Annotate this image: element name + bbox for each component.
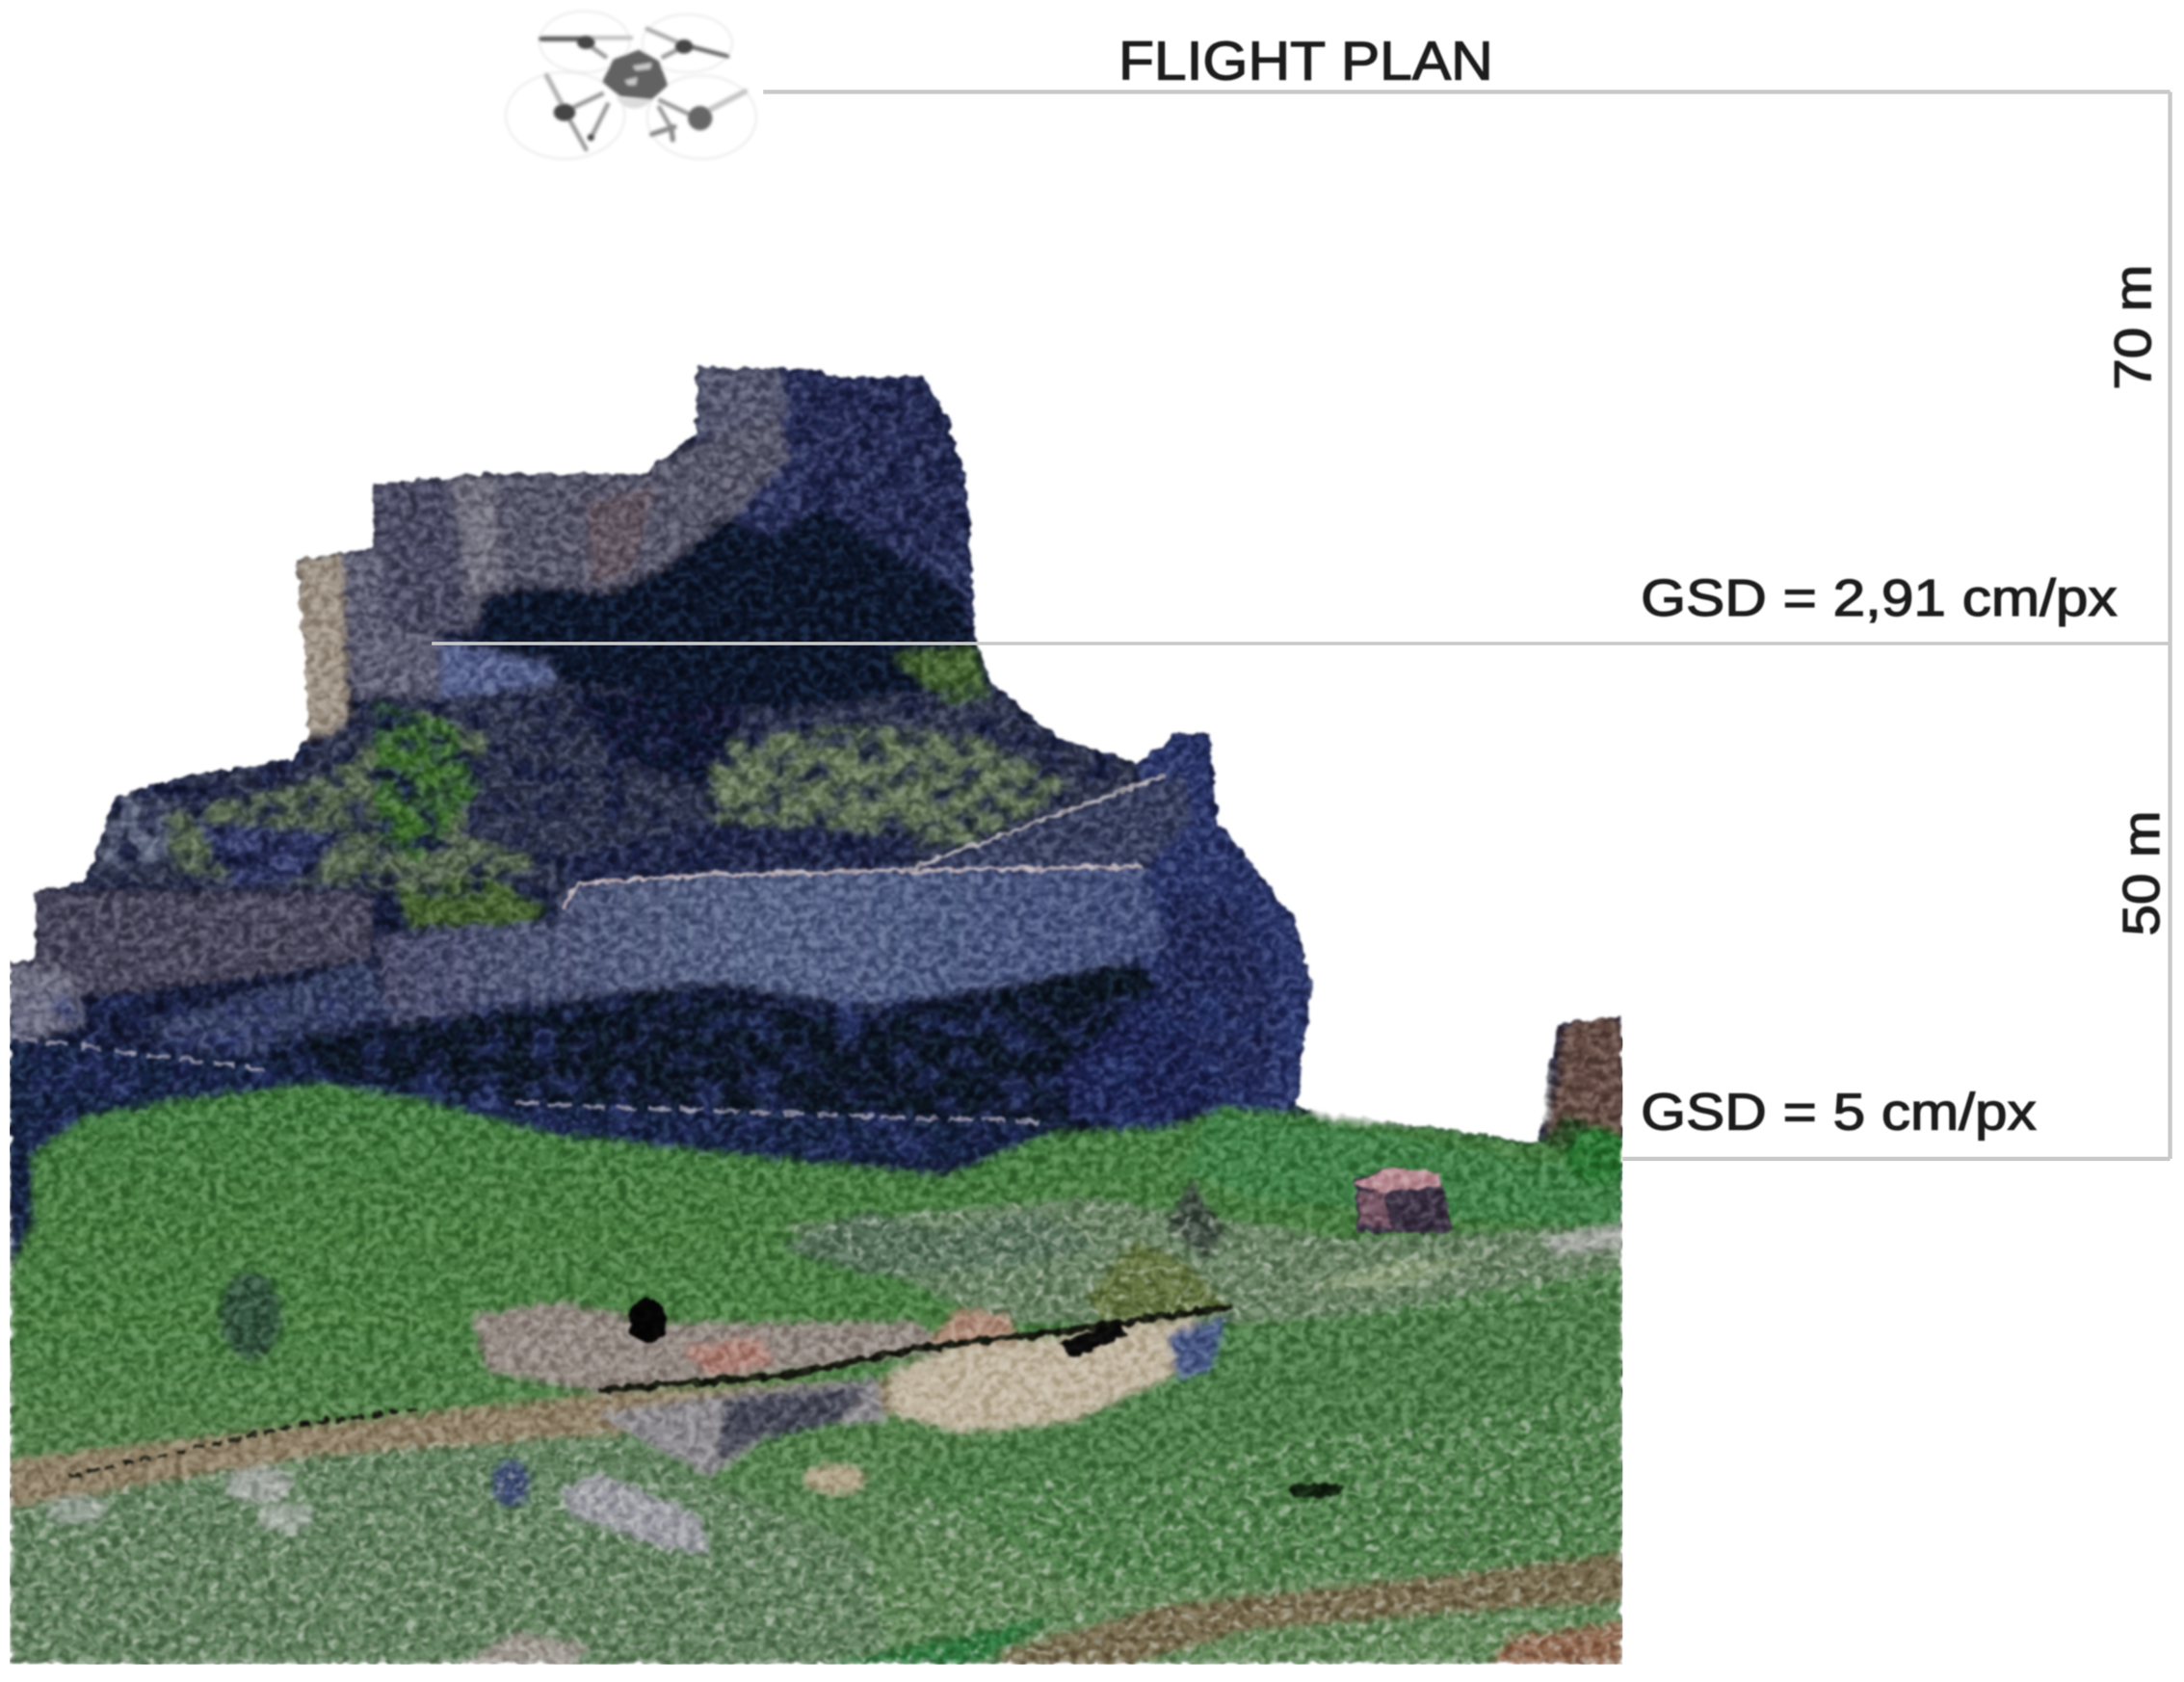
white right margin of the model — [1622, 975, 1650, 1682]
corner tower — [297, 554, 348, 738]
dark shadow under the keep — [480, 507, 978, 709]
drone body — [602, 50, 668, 99]
white cut below the model — [0, 1665, 2184, 1682]
lower left wall band — [10, 1038, 1044, 1184]
label: GSD at castle: GSD = 2,91 cm/px — [1641, 570, 2118, 627]
brown wall patch — [590, 491, 649, 578]
heading: flight plan: FLIGHT PLAN — [1118, 30, 1493, 91]
bright green wedge — [822, 1616, 1059, 1665]
dark trees — [1168, 1177, 1225, 1260]
sharp terrain details — [13, 775, 1233, 1477]
brown tree — [1543, 1016, 1622, 1143]
hillside mottled blotches — [84, 682, 1184, 919]
hillside dark band — [557, 822, 919, 894]
quarry pale — [891, 1309, 1212, 1432]
pink rubble patch — [682, 1337, 773, 1376]
stepped rampart — [153, 961, 390, 1052]
rampart below keep — [440, 641, 557, 703]
dashed wall crest — [13, 1038, 1044, 1122]
blue stone — [491, 1461, 531, 1506]
propeller blades — [541, 29, 745, 149]
bare soil corner — [1490, 1622, 1622, 1665]
hut pink side — [1358, 1193, 1390, 1225]
blue rock under the wall — [1059, 989, 1225, 1128]
pale path on right slope — [1303, 1260, 1477, 1288]
top line from drone — [763, 91, 2171, 93]
small boulder — [46, 1494, 107, 1525]
flight plan bracket lines — [432, 92, 2171, 1159]
small boulder — [225, 1466, 293, 1503]
white left margin — [0, 348, 10, 1682]
dirt track — [10, 1379, 891, 1507]
left dark edge — [10, 1038, 34, 1268]
grass patch behind wall — [397, 875, 550, 926]
stone wall right — [1546, 1225, 1622, 1253]
terrain colour layers — [0, 348, 1630, 1665]
hillside vegetation centre right — [697, 724, 1072, 850]
main wall top edge — [565, 866, 1143, 908]
rock mass base — [0, 348, 1630, 1212]
grey shrubs — [780, 1212, 1100, 1275]
hut — [1354, 1168, 1456, 1233]
main curtain wall — [376, 866, 1168, 1024]
grey green lower ground — [10, 1421, 891, 1665]
label: 50 m height: 50 m — [2114, 810, 2171, 936]
quarry pink mound — [926, 1309, 1016, 1344]
bright green slope — [891, 1268, 1622, 1588]
vertical height line — [2169, 92, 2171, 1159]
noise texture overlay — [0, 348, 1630, 1671]
quarry blue rock — [1168, 1316, 1228, 1379]
white gap before the tree — [1316, 975, 1546, 1121]
pale speckle over the fields — [0, 1184, 1630, 1671]
bottom line at ground — [1622, 1157, 2171, 1160]
hillside pale rock — [100, 787, 167, 863]
olive bush — [1087, 1240, 1233, 1324]
pink rubble area — [474, 1302, 947, 1393]
motors — [554, 36, 712, 141]
left curtain wall — [35, 891, 369, 997]
right rock shade — [1156, 891, 1278, 1115]
dark boulder face — [718, 1386, 871, 1462]
upper castle wall — [373, 412, 788, 629]
hillside green right patch — [891, 647, 989, 703]
hillside base — [84, 682, 1181, 906]
middle line at castle — [432, 643, 2171, 644]
diagonal rampart — [906, 773, 1193, 871]
hillside dark gully — [565, 690, 752, 787]
upper rock blotches — [794, 373, 975, 554]
diagonal rampart highlight — [906, 775, 1168, 871]
icon: quadcopter drone — [506, 12, 756, 159]
dark shrub at tree base — [1539, 1115, 1602, 1149]
hillside green strip — [376, 703, 481, 863]
body underside — [617, 98, 652, 109]
lower rock beneath wall — [10, 961, 84, 1038]
dark crack line — [69, 1409, 418, 1477]
grey mid ground band — [780, 1197, 1622, 1324]
dark hole on grass — [1288, 1482, 1344, 1499]
bottom rock — [460, 1632, 592, 1665]
drone arms — [573, 46, 689, 138]
bright grass top — [1184, 1115, 1622, 1225]
dark crack line east — [599, 1306, 1233, 1390]
grass shadow left — [220, 1272, 281, 1361]
black hole — [628, 1298, 668, 1343]
upper rock outcrop — [694, 368, 975, 634]
quarry black gap — [1059, 1324, 1128, 1358]
turret — [697, 366, 788, 434]
green bush — [1567, 1127, 1628, 1185]
ground slope — [10, 1084, 1622, 1665]
terrain photogrammetry model — [0, 348, 1630, 1671]
hut pink top — [1354, 1168, 1440, 1193]
body highlights — [624, 63, 652, 85]
hillside grey vegetation left — [140, 710, 557, 891]
brown path bottom right — [1003, 1553, 1622, 1665]
propeller guards — [506, 12, 756, 159]
corner tower shade — [343, 546, 446, 696]
grey blue boulder row — [599, 1379, 884, 1477]
large boulder — [560, 1474, 710, 1553]
shadowed wall section — [376, 481, 465, 627]
label: 70 m height: 70 m — [2105, 265, 2162, 390]
right rock face — [1100, 732, 1312, 1131]
small boulder — [257, 1504, 313, 1532]
label: GSD at ground: GSD = 5 cm/px — [1641, 1085, 2037, 1142]
hillside blue rock left — [195, 822, 346, 886]
light wall strip — [454, 476, 499, 596]
lower wall shadow band — [265, 961, 1212, 1156]
tan stone — [805, 1465, 866, 1493]
lower rock blue blotches — [10, 996, 1305, 1177]
